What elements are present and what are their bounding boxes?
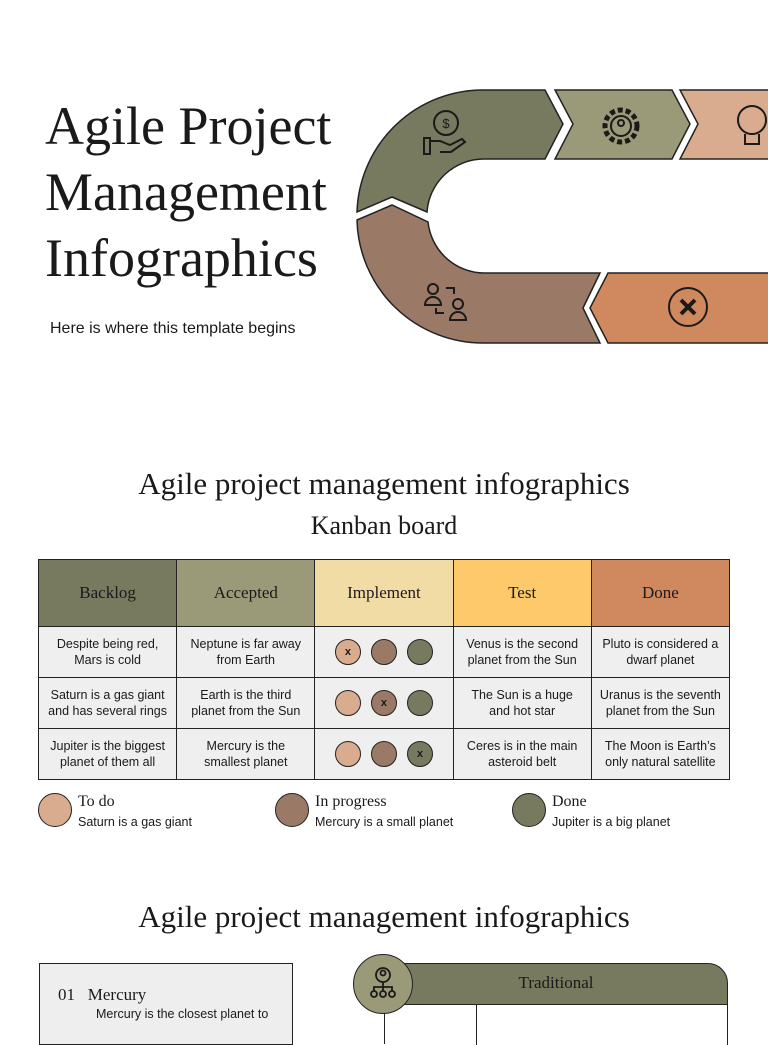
- kanban table: Venus is the second: [466, 637, 578, 651]
- legend: in progress: Mercury is a small planet: [315, 815, 453, 829]
- kanban table: dwarf planet: [626, 653, 694, 667]
- kanban table: planet of them all: [60, 755, 155, 769]
- kanban table: The Moon is Earth’s: [605, 739, 716, 753]
- subtitle: Here is where this template begins: [50, 320, 295, 337]
- table cells: [476, 1004, 728, 1045]
- kanban table: only natural satellite: [605, 755, 716, 769]
- legend: in progress: In progress: [315, 793, 387, 810]
- kanban table: x: [345, 646, 351, 658]
- kanban table: Pluto is considered a: [602, 637, 718, 651]
- kanban table: planet from the Sun: [191, 704, 300, 718]
- kanban table: Despite being red,: [57, 637, 158, 651]
- segment: bulb: [680, 90, 768, 159]
- panel: traditional comparison: [353, 954, 728, 1045]
- kanban table: Earth is the third: [200, 688, 291, 702]
- legend: done: Done: [552, 793, 587, 810]
- icon: people exchange: [425, 284, 466, 320]
- kanban table: Backlog: [79, 583, 136, 602]
- header bar: [384, 963, 728, 1005]
- kanban table: planet from the Sun: [468, 653, 577, 667]
- legend: in progress: [275, 793, 454, 829]
- kanban table: Jupiter is the biggest: [50, 739, 165, 753]
- title: Management: [45, 162, 327, 222]
- kanban table: x: [417, 748, 423, 760]
- kanban table: and has several rings: [48, 704, 167, 718]
- legend: to do: To do: [78, 793, 115, 810]
- kanban table: asteroid belt: [488, 755, 556, 769]
- kanban table: and hot star: [489, 704, 555, 718]
- kanban table: x: [381, 697, 387, 709]
- segment: people exchange: [357, 205, 600, 343]
- kanban table: Neptune is far away: [191, 637, 301, 651]
- kanban table: The Sun is a huge: [471, 688, 573, 702]
- title: Infographics: [45, 228, 318, 288]
- icon: cancel: [669, 288, 707, 326]
- subheading: Kanban board: Kanban board: [311, 511, 457, 540]
- kanban table: Mercury is the: [207, 739, 285, 753]
- kanban table: from Earth: [217, 653, 275, 667]
- segment: finance: [357, 90, 563, 212]
- icon: gear: [605, 110, 637, 142]
- kanban table: Test: [508, 583, 536, 602]
- U-shaped process diagram: [356, 89, 768, 344]
- kanban table: Ceres is in the main: [467, 739, 577, 753]
- icon: org chart circle: [353, 954, 413, 1014]
- kanban table: Done: [642, 583, 679, 602]
- kanban table: planet from the Sun: [606, 704, 715, 718]
- segment: gear: [555, 90, 690, 159]
- icon: money hand: $: [442, 116, 450, 131]
- kanban table: Accepted: [214, 583, 278, 602]
- kanban table: Implement: [347, 583, 421, 602]
- section heading 1: Agile project management infographics: [138, 466, 630, 501]
- item heading: 01 Mercury: [58, 985, 146, 1004]
- icon: money hand: [424, 111, 465, 154]
- kanban table: smallest planet: [204, 755, 287, 769]
- icon: bulb: [738, 106, 766, 144]
- legend: to do: [38, 793, 192, 829]
- title: [45, 96, 332, 288]
- header bar: Traditional: [519, 973, 593, 992]
- legend: done: [512, 793, 670, 829]
- kanban table: Saturn is a gas giant: [51, 688, 165, 702]
- legend: done: Jupiter is a big planet: [552, 815, 670, 829]
- legend: to do: Saturn is a gas giant: [78, 815, 192, 829]
- kanban table: Mars is cold: [74, 653, 141, 667]
- kanban table: [38, 559, 730, 780]
- item text: Mercury is the closest planet to: [96, 1007, 268, 1021]
- title: Agile Project: [45, 96, 331, 156]
- kanban table: Uranus is the seventh: [600, 688, 721, 702]
- segment: cancel: [590, 273, 768, 343]
- panel: mercury: [39, 963, 293, 1045]
- section heading 2: Agile project management infographics: [138, 899, 630, 934]
